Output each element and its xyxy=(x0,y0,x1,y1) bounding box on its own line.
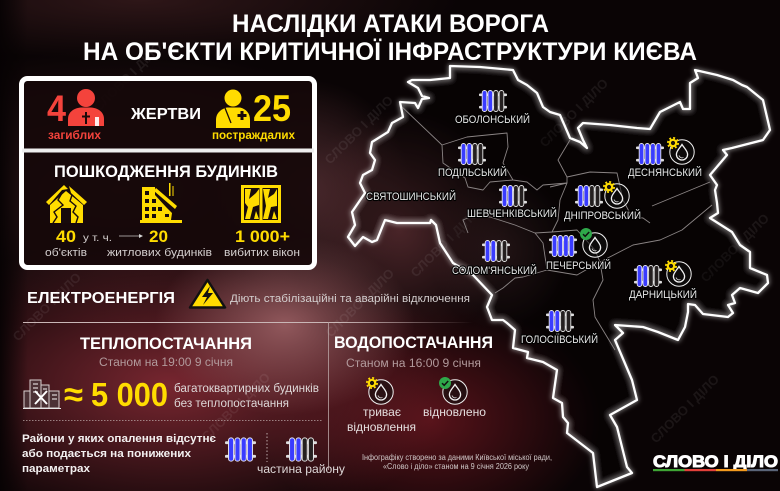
stat: 20 residential: 20 xyxy=(149,227,168,246)
watermarks: СЛОВО І ДІЛО xyxy=(323,266,397,340)
district: Pechersk xyxy=(546,228,611,272)
injured count: 25 xyxy=(253,88,291,129)
source note: Інфографіку створено за даними Київської міської ради, xyxy=(362,453,552,462)
district: Dnipro: ДНІПРОВСЬКИЙ xyxy=(564,209,641,222)
stat: 40 objects: об'єктів xyxy=(45,247,87,259)
section: electricity xyxy=(27,280,470,308)
legend: heating: Райони у яких опалення відсутнє xyxy=(22,433,216,445)
icon: broken window xyxy=(242,186,280,222)
icon: high voltage xyxy=(190,280,225,308)
district: Solomianskyi xyxy=(452,240,537,277)
legend: heating: параметрах xyxy=(22,463,91,475)
legend: heating: або подається на понижених xyxy=(22,448,192,460)
source note xyxy=(362,453,552,471)
stat: 1000+ windows: вибитих вікон xyxy=(224,247,300,259)
district: Shevchenko: ШЕВЧЕНКІВСЬКИЙ xyxy=(467,207,557,220)
legend: heating: частина району xyxy=(257,462,345,476)
district: Dnipro xyxy=(564,182,641,222)
section: water supply xyxy=(334,334,493,434)
source note: «Слово і діло» станом на 9 січня 2026 року xyxy=(383,462,529,471)
district: Podil: ПОДІЛЬСЬКИЙ xyxy=(438,166,507,179)
district: Darnytsia: ДАРНИЦЬКИЙ xyxy=(629,288,697,301)
icon: destroyed building xyxy=(140,183,182,223)
district: Obolon: ОБОЛОНСЬКИЙ xyxy=(455,113,530,126)
stat: 40 objects: 40 xyxy=(56,227,76,246)
heading: building damage: ПОШКОДЖЕННЯ БУДИНКІВ xyxy=(54,162,278,181)
district: Holosiiv xyxy=(521,310,598,346)
watermarks: СЛОВО І ДІЛО xyxy=(408,206,482,280)
icon: water in recovery xyxy=(367,378,393,404)
injured count xyxy=(212,88,296,142)
watermarks: СЛОВО І ДІЛО xyxy=(698,211,772,285)
district borders xyxy=(400,105,712,350)
district: Desna: ДЕСНЯНСЬКИЙ xyxy=(628,166,702,179)
section: heat supply: без теплопостачання xyxy=(174,398,289,410)
district: Darnytsia xyxy=(629,261,697,301)
stat: about 5000: ≈ xyxy=(64,376,83,414)
section: heat supply xyxy=(23,335,319,414)
map of Kyiv xyxy=(348,66,770,487)
watermarks: СЛОВО І ДІЛО xyxy=(10,270,84,344)
heading: victims: ЖЕРТВИ xyxy=(130,106,201,123)
panel: casualties and building damage xyxy=(22,78,314,268)
district: Obolon xyxy=(455,90,530,126)
title xyxy=(83,10,697,66)
injured count: постраждалих xyxy=(212,130,296,142)
stat: about 5000: 5 000 xyxy=(91,376,168,413)
section: heat supply: багатоквартирних будинків xyxy=(174,383,319,395)
watermarks: СЛОВО І ДІЛО xyxy=(648,372,722,446)
section dividers xyxy=(23,322,473,470)
district: Shevchenko xyxy=(467,186,557,220)
killed count xyxy=(47,88,104,142)
section: water supply: відновлення xyxy=(347,420,416,434)
including note with arrow: у т. ч. xyxy=(83,232,112,244)
section: electricity: Діють стабілізаційні та аварійні відключення xyxy=(230,293,470,305)
district: Pechersk: ПЕЧЕРСЬКИЙ xyxy=(546,259,611,272)
legend: heating xyxy=(22,433,345,476)
watermarks: СЛОВО І ДІЛО xyxy=(91,40,165,114)
stat: 1000+ windows: 1 000+ xyxy=(235,227,290,246)
section: water supply: Станом на 16:00 9 січня xyxy=(346,358,481,370)
outer border xyxy=(348,66,770,487)
section: heat supply: Станом на 19:00 9 січня xyxy=(99,357,233,369)
icon: cracked house xyxy=(46,185,87,223)
section: water supply: відновлено xyxy=(423,405,486,419)
district: Holosiiv: ГОЛОСІЇВСЬКИЙ xyxy=(521,333,598,346)
watermarks: СЛОВО І ДІЛО xyxy=(322,93,396,167)
icon: radiator partial xyxy=(286,438,317,461)
icon: water restored xyxy=(439,377,467,404)
icon: buildings crossed xyxy=(23,380,61,408)
district: Solomianskyi: СОЛОМ'ЯНСЬКИЙ xyxy=(452,264,537,277)
section: heat supply: ТЕПЛОПОСТАЧАННЯ xyxy=(80,335,252,353)
district: Sviatoshyn: СВЯТОШИНСЬКИЙ xyxy=(366,190,456,203)
icon: radiator full xyxy=(225,438,256,461)
section: water supply: ВОДОПОСТАЧАННЯ xyxy=(334,334,493,352)
stat: 20 residential xyxy=(107,227,212,259)
stat: about 5000 xyxy=(64,376,168,414)
watermarks: СЛОВО І ДІЛО xyxy=(199,370,273,444)
section: electricity: ЕЛЕКТРОЕНЕРГІЯ xyxy=(27,290,175,307)
section: water supply: триває xyxy=(363,405,401,419)
stat: 20 residential: житлових будинків xyxy=(107,247,212,259)
stat: 1000+ windows xyxy=(224,227,300,259)
including note with arrow xyxy=(83,232,143,244)
title: НАСЛІДКИ АТАКИ ВОРОГА xyxy=(232,10,549,38)
title: НА ОБ'ЄКТИ КРИТИЧНОЇ ІНФРАСТРУКТУРИ КИЄВА xyxy=(83,38,697,66)
logo: СЛОВО І ДІЛО xyxy=(653,452,778,471)
district: Desna xyxy=(628,138,702,179)
district: Podil xyxy=(438,144,507,179)
stat: 40 objects xyxy=(45,227,87,259)
killed count: загиблих xyxy=(48,130,102,142)
watermarks: СЛОВО І ДІЛО xyxy=(537,76,611,150)
killed count: 4 xyxy=(47,88,66,129)
